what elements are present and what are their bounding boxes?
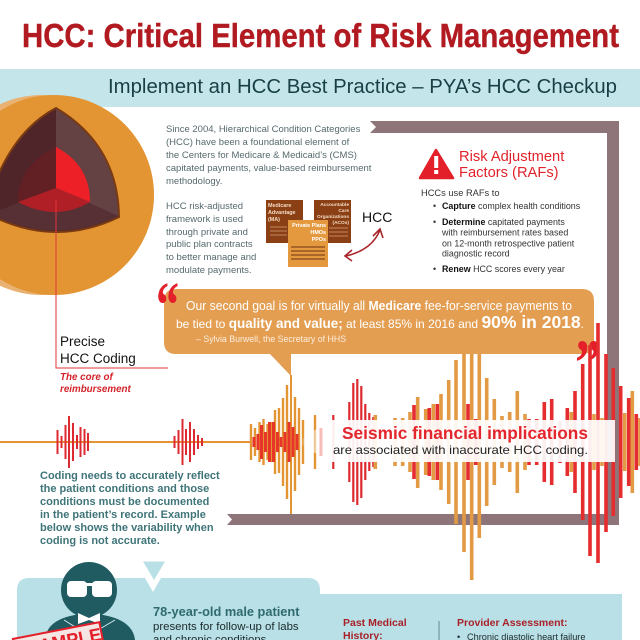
coding explanation text: the patient conditions and those xyxy=(40,483,209,495)
risk adjustment factors panel: on 12-month retrospective patient xyxy=(442,238,575,248)
seismic implications banner: are associated with inaccurate HCC coding. xyxy=(333,443,588,457)
earth core diagram xyxy=(0,95,154,295)
precise HCC coding label xyxy=(56,200,168,395)
coding explanation text: below shows the variability when xyxy=(40,522,214,534)
risk adjustment factors panel: • xyxy=(433,264,436,274)
risk adjustment factors panel: Renew HCC scores every year xyxy=(442,264,565,274)
icon: patient figure xyxy=(45,562,135,640)
intro text: through private and xyxy=(166,227,248,238)
closing quote mark: ” xyxy=(575,327,601,400)
callout: quote bubble: Our second goal is for virtually all Medicare fee-for-service payments to xyxy=(186,298,572,313)
risk adjustment factors panel: diagnostic record xyxy=(442,248,510,258)
callout: quote bubble: – Sylvia Burwell, the Secretary of HHS xyxy=(196,334,346,344)
seismic waveform chart xyxy=(0,323,640,580)
past medical history heading xyxy=(343,617,407,640)
risk adjustment factors panel: Capture complex health conditions xyxy=(442,201,581,211)
payer documents icon xyxy=(266,200,351,267)
coding explanation text: Coding needs to accurately reflect xyxy=(40,470,220,482)
opening quote mark: “ xyxy=(156,269,179,342)
risk adjustment factors panel: • xyxy=(433,217,436,227)
risk adjustment factors panel xyxy=(420,149,581,274)
risk adjustment factors panel: Risk Adjustment xyxy=(459,149,564,165)
precise HCC coding label: HCC Coding xyxy=(60,351,136,366)
intro text: Since 2004, Hierarchical Condition Categories xyxy=(166,124,361,135)
provider assessment xyxy=(457,617,585,640)
coding explanation text: in the patient’s record. Example xyxy=(40,509,206,521)
intro text: modulate payments. xyxy=(166,265,252,276)
patient text: 78-year-old male patient xyxy=(153,604,300,619)
intro text: the Centers for Medicare & Medicaid’s (CMS) xyxy=(166,150,357,161)
seismic implications banner: Seismic financial implications xyxy=(342,423,588,443)
HCC label with arrow xyxy=(345,209,392,261)
seismic implications banner xyxy=(297,420,615,462)
payer documents icon: (ACOs) xyxy=(332,220,349,226)
payer documents icon: HMOs xyxy=(310,230,326,236)
intro text: to better manage and xyxy=(166,252,256,263)
patient text: presents for follow-up of labs xyxy=(153,621,299,633)
HCC label with arrow: HCC xyxy=(362,209,392,225)
subtitle band: Implement an HCC Best Practice – PYA’s HCC Checkup xyxy=(108,75,617,98)
intro text: framework is used xyxy=(166,214,243,225)
risk adjustment factors panel: HCCs use RAFs to xyxy=(421,188,500,198)
coding explanation text xyxy=(40,470,220,547)
coding explanation text: conditions must be documented xyxy=(40,496,209,508)
risk adjustment factors panel: Factors (RAFs) xyxy=(459,165,559,181)
risk adjustment factors panel: • xyxy=(433,201,436,211)
pointer triangle xyxy=(143,562,165,592)
subtitle band xyxy=(0,69,640,107)
icon: warning triangle xyxy=(420,150,453,178)
intro text: HCC risk-adjusted xyxy=(166,201,243,212)
precise HCC coding label: Precise xyxy=(60,334,105,349)
payer documents icon: Medicare xyxy=(268,203,291,209)
coding explanation text: coding is not accurate. xyxy=(40,535,160,547)
intro text: methodology. xyxy=(166,176,222,187)
precise HCC coding label: The core of xyxy=(60,372,115,383)
payer documents icon: PPOs xyxy=(312,237,326,243)
intro text: (HCC) have been a foundational element of xyxy=(166,137,350,148)
risk adjustment factors panel: Determine capitated payments xyxy=(442,217,565,227)
intro text xyxy=(166,124,372,276)
past medical history heading: Past Medical xyxy=(343,617,407,629)
risk adjustment factors panel: with reimbursement rates based xyxy=(441,228,568,238)
precise HCC coding label: reimbursement xyxy=(60,384,132,395)
callout: quote bubble: be tied to quality and value; at least 85% in 2016 and 90% in 2018. xyxy=(176,312,584,332)
intro text: public plan contracts xyxy=(166,239,253,250)
patient text xyxy=(153,604,300,640)
payer documents icon: Care xyxy=(338,208,349,214)
callout: quote bubble xyxy=(164,289,594,375)
payer documents icon: (MA) xyxy=(268,217,280,223)
payer documents icon: Accountable xyxy=(320,202,349,208)
payer documents icon: Advantage xyxy=(268,210,296,216)
payer documents icon: Organizations xyxy=(317,214,349,220)
panel: patient example xyxy=(13,562,622,640)
intro text: capitated payments, value-based reimbursement xyxy=(166,163,372,174)
provider assessment: Provider Assessment: xyxy=(457,617,568,629)
payer documents icon: Private Plans xyxy=(292,223,326,229)
gray frame xyxy=(227,121,619,525)
